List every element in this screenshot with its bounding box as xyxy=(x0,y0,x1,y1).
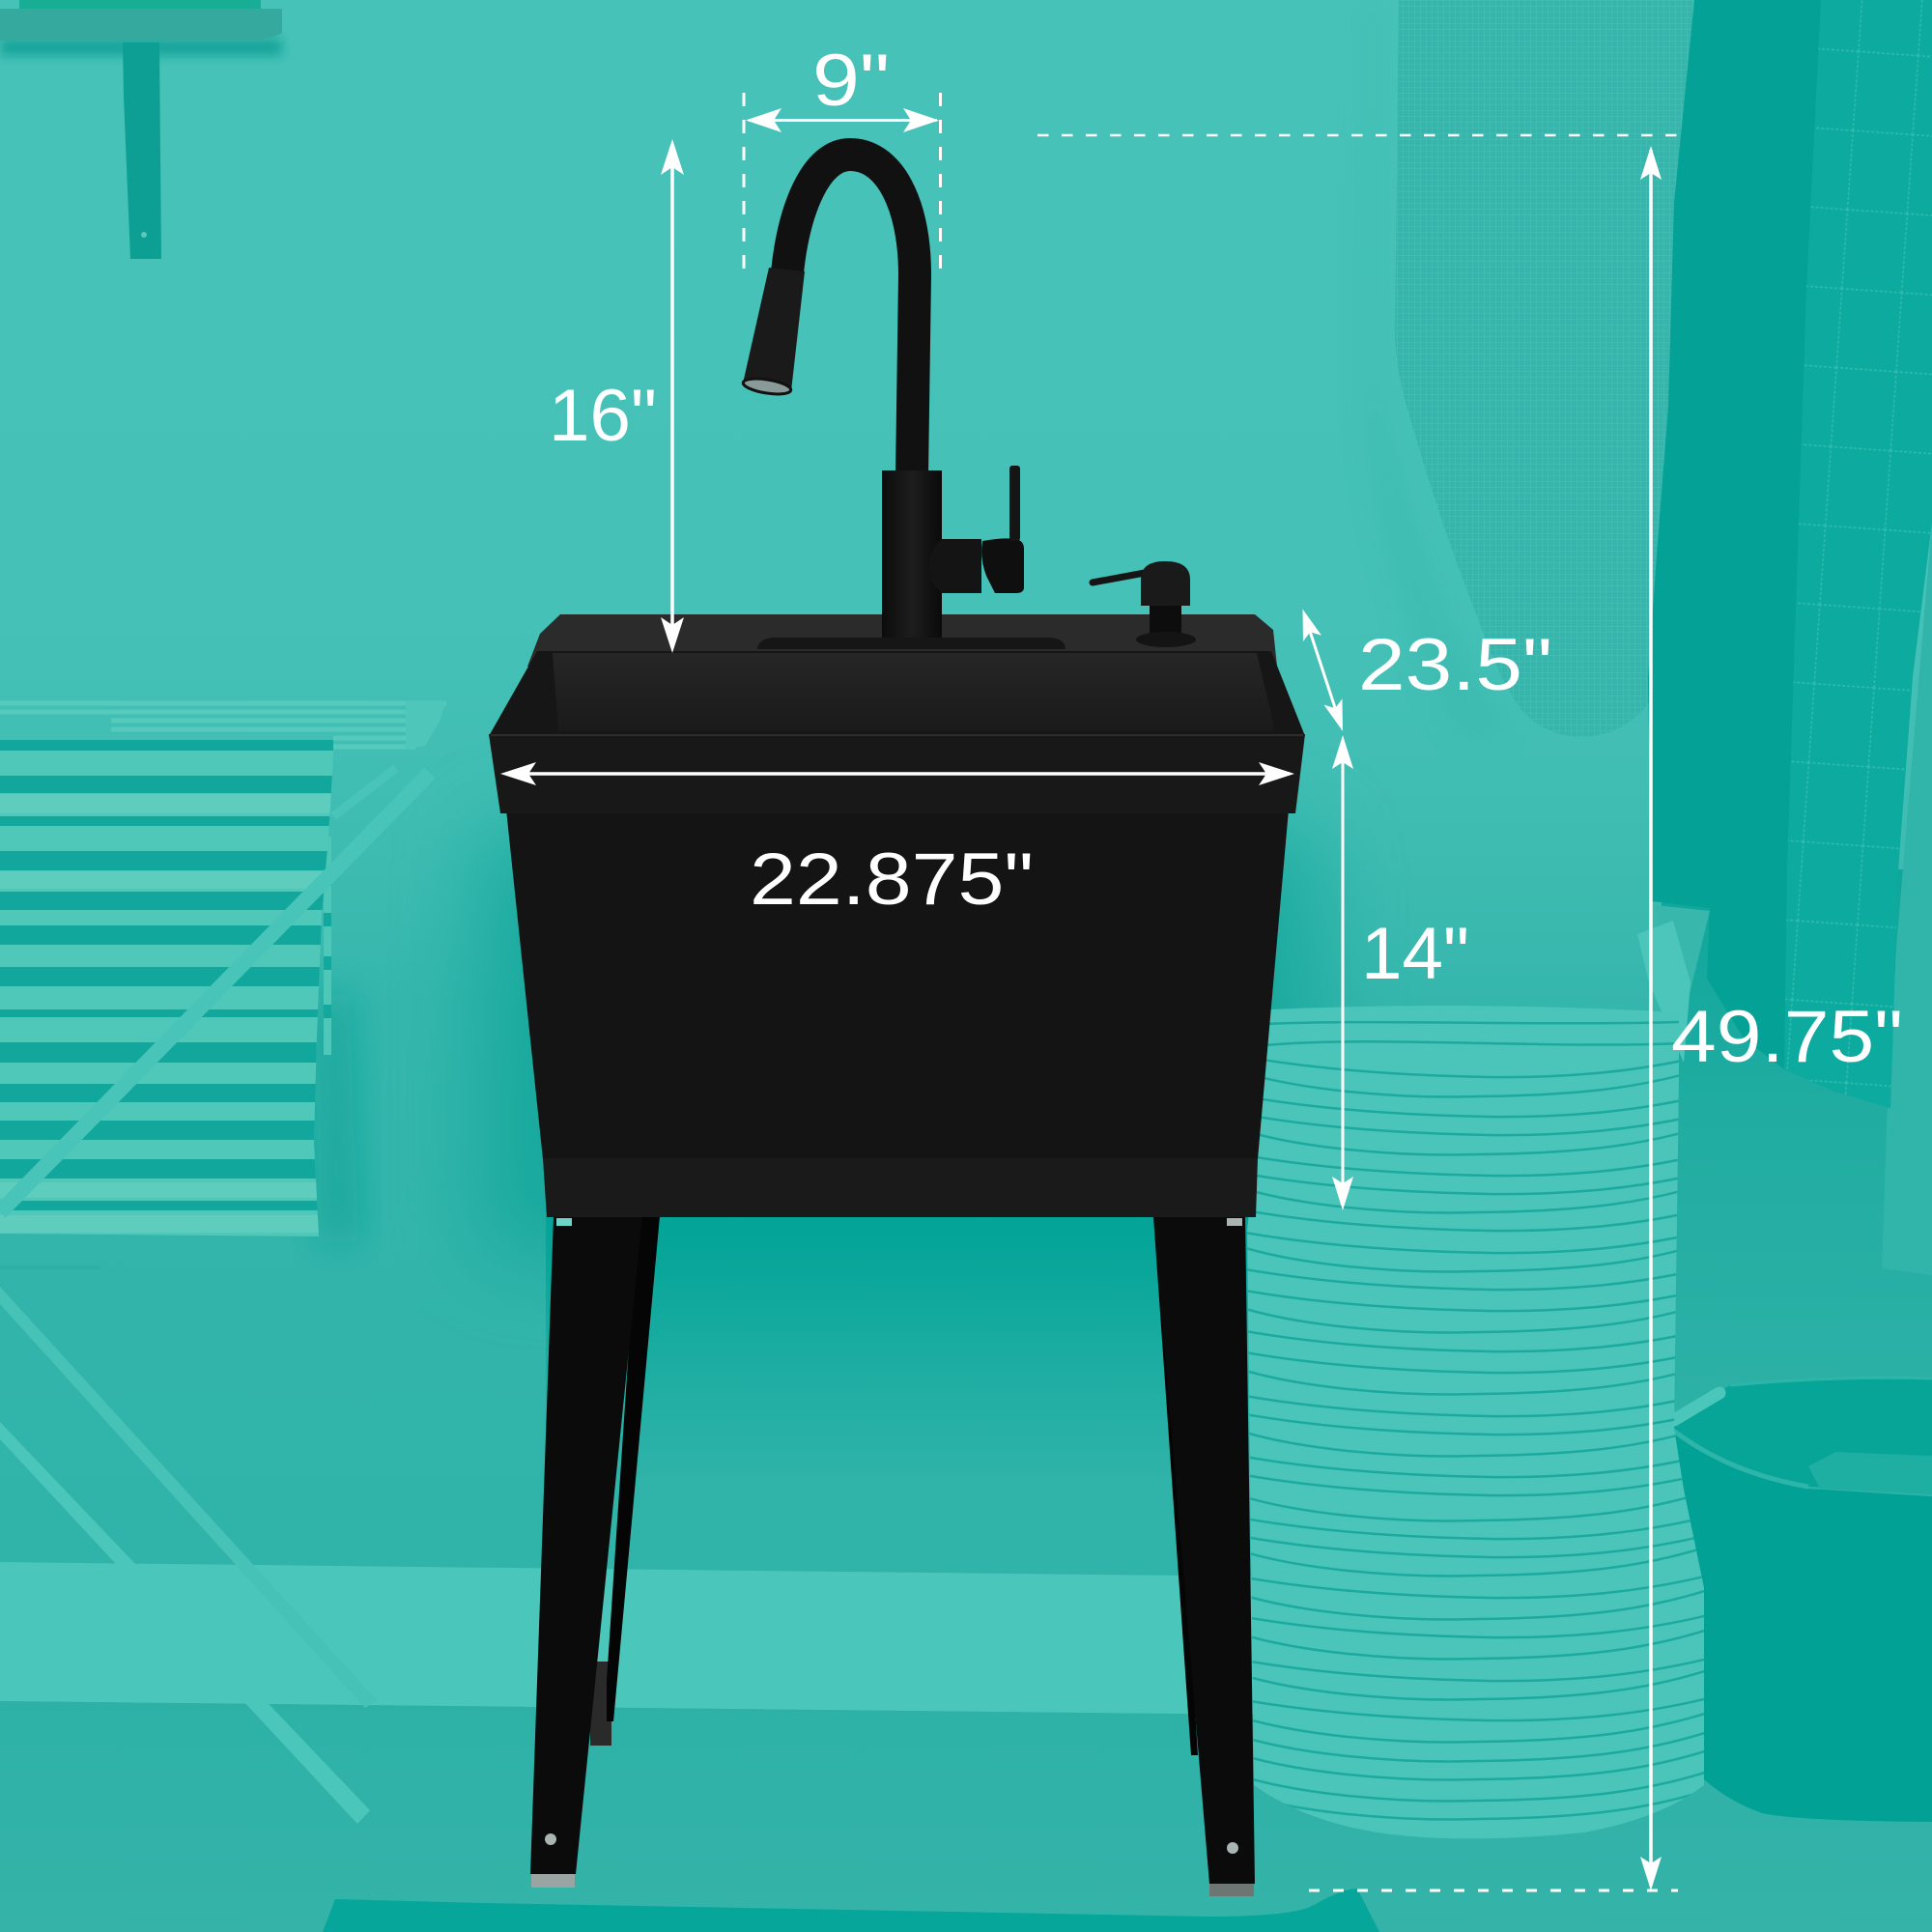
pull-down sprayer xyxy=(743,268,805,391)
towel side strip xyxy=(324,837,331,1055)
dimension: 22.875 inch width xyxy=(500,762,1294,921)
front rim xyxy=(489,734,1305,813)
dimension: 23.5 inch depth xyxy=(1293,606,1552,734)
ironing board xyxy=(1367,0,1700,737)
wall shadow behind sink xyxy=(483,831,1314,1486)
lever xyxy=(1009,466,1020,541)
rear deck xyxy=(527,614,1277,667)
basin interior xyxy=(489,651,1305,736)
front left leg xyxy=(530,1216,642,1874)
back left leg bracket xyxy=(590,1662,611,1746)
back left leg xyxy=(607,1216,660,1721)
base band xyxy=(543,1158,1258,1217)
handle body xyxy=(928,539,981,593)
handle cap xyxy=(981,538,1024,593)
dimension: 9 inch faucet reach xyxy=(744,40,941,272)
deck plate xyxy=(757,638,1065,649)
dimension: 16 inch faucet height: 16" xyxy=(549,375,657,457)
dimension: 23.5 inch depth: 23.5" xyxy=(1358,624,1552,706)
rack diagonal supports xyxy=(0,768,430,1212)
dimension: 22.875 inch width: 22.875" xyxy=(750,838,1034,921)
faucet base xyxy=(882,470,942,638)
striped laundry hamper xyxy=(1236,995,1719,1855)
dark towel xyxy=(1648,0,1932,1108)
bolts xyxy=(545,1218,1242,1854)
floor xyxy=(0,1701,1932,1932)
tub body xyxy=(506,810,1289,1159)
striped towel xyxy=(0,739,338,1242)
faucet xyxy=(742,155,1065,649)
sprayer nozzle xyxy=(742,376,792,397)
dimension: 49.75 inch overall height xyxy=(1037,135,1903,1890)
feet xyxy=(531,1874,1254,1896)
sink legs xyxy=(530,1216,1255,1896)
hanging towels xyxy=(1648,0,1932,1410)
soap dispenser xyxy=(1093,561,1196,647)
wall shelf xyxy=(0,0,282,259)
front right leg xyxy=(1153,1216,1255,1884)
dimension: 16 inch faucet height xyxy=(549,139,684,653)
dimension: 14 inch basin depth: 14" xyxy=(1361,913,1469,995)
baseboard xyxy=(0,1562,1352,1716)
drying rack with striped towel xyxy=(0,701,446,1824)
gooseneck spout xyxy=(787,155,915,475)
hamper tissue xyxy=(1637,905,1710,1063)
sink tub xyxy=(489,614,1305,1217)
checked towel xyxy=(1784,0,1932,1108)
light towel xyxy=(1882,522,1932,1275)
bucket xyxy=(1672,1378,1932,1822)
back right leg xyxy=(1153,1216,1198,1755)
dimension: 49.75 inch overall height: 49.75" xyxy=(1671,996,1903,1078)
rack rods xyxy=(0,703,446,747)
floor rug xyxy=(323,1889,1379,1932)
dimension: 14 inch basin depth xyxy=(1332,735,1469,1210)
dimension: 9 inch faucet reach: 9" xyxy=(812,40,890,122)
